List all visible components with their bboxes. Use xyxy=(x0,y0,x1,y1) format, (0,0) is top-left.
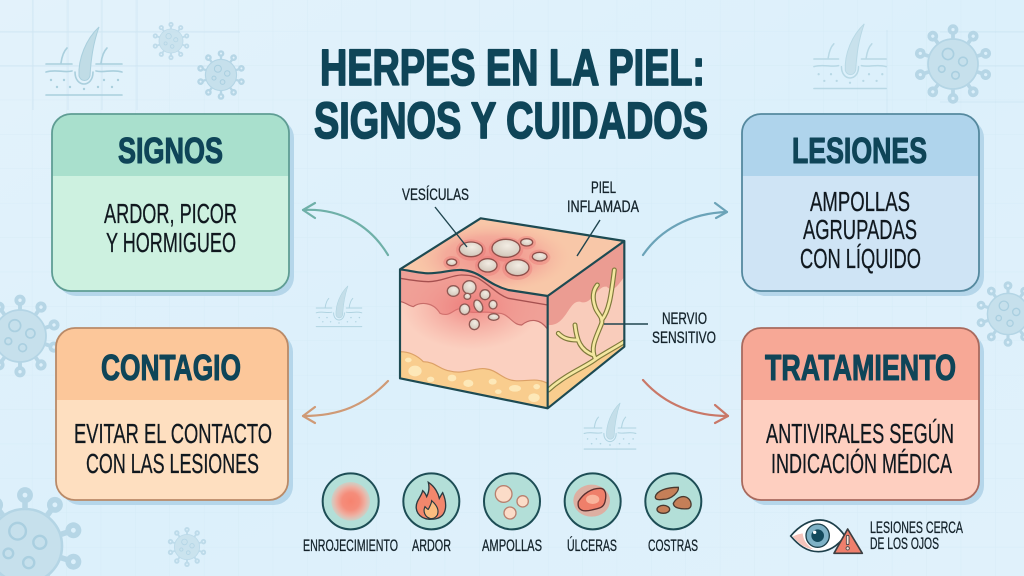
text: tratamiento body xyxy=(766,418,954,479)
callout: nervio sensitivo: NERVIO xyxy=(662,310,707,328)
label: ulceras: ÚLCERAS xyxy=(567,536,617,555)
callout: piel inflamada: PIEL xyxy=(591,179,616,197)
text: lesiones cerca de los ojos xyxy=(870,519,963,553)
arrow: to lesiones xyxy=(643,203,727,255)
title: SIGNOS Y CUIDADOS xyxy=(314,92,708,149)
text: signos body: Y HORMIGUEO xyxy=(106,227,236,258)
icon: enrojecimiento xyxy=(323,473,379,529)
icon: virus right xyxy=(977,283,1024,345)
text: contagio body: EVITAR EL CONTACTO xyxy=(74,418,272,449)
text: contagio body xyxy=(74,418,272,479)
heading: signos: SIGNOS xyxy=(118,130,223,171)
icon: virus large top right xyxy=(916,26,990,102)
icon: eye warning xyxy=(791,520,862,553)
icon: skin hair center left xyxy=(316,286,362,327)
callout: vesiculas: VESÍCULAS xyxy=(402,185,469,204)
panel: tratamiento xyxy=(742,328,984,505)
icon: skin hair center bottom xyxy=(584,403,636,449)
icon: ardor xyxy=(403,473,459,529)
panel: signos xyxy=(52,114,294,296)
icon: skin hair top right xyxy=(814,24,886,88)
callout: piel inflamada xyxy=(567,179,639,256)
arrow: to signos xyxy=(303,203,388,255)
panel: lesiones xyxy=(742,114,984,296)
icon row xyxy=(303,473,701,555)
text: signos body xyxy=(104,198,237,258)
label: ampollas: AMPOLLAS xyxy=(482,537,542,555)
icon: virus left xyxy=(0,297,59,375)
top face xyxy=(400,218,627,298)
text: lesiones body: CON LÍQUIDO xyxy=(800,243,921,274)
label: enrojecimiento: ENROJECIMIENTO xyxy=(303,537,398,555)
label: costras: COSTRAS xyxy=(648,537,698,555)
right face xyxy=(548,241,624,410)
text: lesiones body xyxy=(800,186,921,274)
text: lesiones body: AMPOLLAS xyxy=(810,186,910,217)
block outline xyxy=(400,218,624,408)
title xyxy=(314,39,708,149)
title: HERPES EN LA PIEL: xyxy=(320,39,705,96)
front face xyxy=(400,263,548,410)
callout: nervio sensitivo xyxy=(604,310,716,347)
icon: ampollas xyxy=(484,473,540,529)
callout: piel inflamada: INFLAMADA xyxy=(567,198,639,216)
text: lesiones body: AGRUPADAS xyxy=(803,214,917,245)
skin cross-section diagram xyxy=(400,218,627,410)
callout: vesiculas xyxy=(402,185,469,247)
text: signos body: ARDOR, PICOR xyxy=(104,198,237,229)
label: ardor: ARDOR xyxy=(412,537,451,555)
callout: nervio sensitivo: SENSITIVO xyxy=(652,329,716,347)
icon: virus medium top xyxy=(198,51,244,99)
arrow: to contagio xyxy=(303,381,388,423)
icon: ulceras xyxy=(565,473,621,529)
heading: tratamiento: TRATAMIENTO xyxy=(765,347,956,388)
panel: contagio xyxy=(56,328,293,505)
text: lesiones cerca de los ojos: DE LOS OJOS xyxy=(870,535,939,553)
arrow: to tratamiento xyxy=(643,380,728,423)
icon: costras xyxy=(645,473,701,529)
heading: contagio: CONTAGIO xyxy=(101,347,241,388)
icon: virus bottom small xyxy=(168,528,206,566)
icon: skin hair top left xyxy=(46,27,122,95)
text: lesiones cerca de los ojos: LESIONES CERCA xyxy=(870,519,963,537)
icon: virus small top xyxy=(153,23,189,59)
icon: virus bottom left xyxy=(0,490,80,576)
heading: lesiones: LESIONES xyxy=(792,130,927,171)
text: contagio body: CON LAS LESIONES xyxy=(86,448,259,479)
